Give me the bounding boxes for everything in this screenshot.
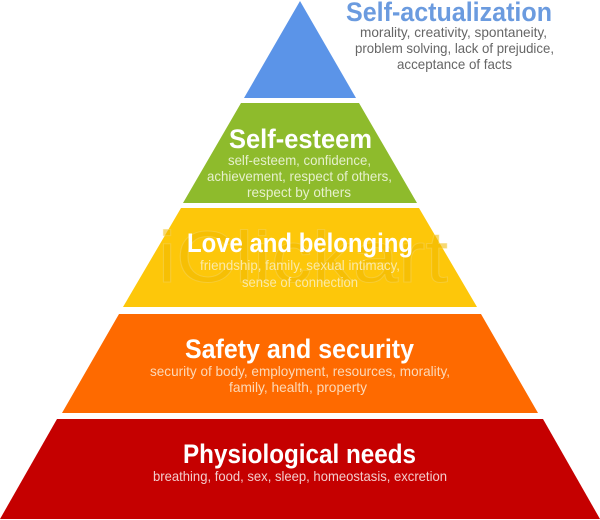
tier: love and belonging [123, 208, 477, 307]
description: self-esteem: respect by others [247, 184, 351, 200]
description: self-esteem [207, 152, 392, 200]
description: physiological needs: breathing, food, sex, sleep, homeostasis, excretion [153, 468, 447, 484]
description: safety and security: family, health, property [229, 379, 367, 395]
heading: physiological needs: Physiological needs [183, 439, 416, 469]
tier: physiological needs [0, 419, 600, 519]
description: self-esteem: self-esteem, confidence, [228, 152, 371, 168]
watermark: iClickart [158, 218, 448, 298]
description: self-actualization [355, 24, 554, 72]
tier: self-actualization [244, 0, 554, 98]
description: self-actualization: acceptance of facts [397, 56, 512, 72]
description: self-esteem: achievement, respect of others, [207, 168, 392, 184]
description: safety and security [150, 363, 450, 395]
heading: safety and security: Safety and security [185, 334, 414, 364]
description: safety and security: security of body, employment, resources, morality, [150, 363, 450, 379]
description: love and belonging: sense of connection [242, 274, 358, 290]
description: self-actualization: problem solving, lack of prejudice, [355, 40, 554, 56]
description: love and belonging [200, 257, 400, 290]
description: self-actualization: morality, creativity, spontaneity, [360, 24, 547, 40]
tier: self-esteem [183, 103, 417, 203]
tier: safety and security [62, 314, 538, 413]
description: love and belonging: friendship, family, sexual intimacy, [200, 257, 400, 273]
heading: self-esteem: Self-esteem [229, 124, 372, 154]
heading: love and belonging: Love and belonging [187, 228, 413, 258]
